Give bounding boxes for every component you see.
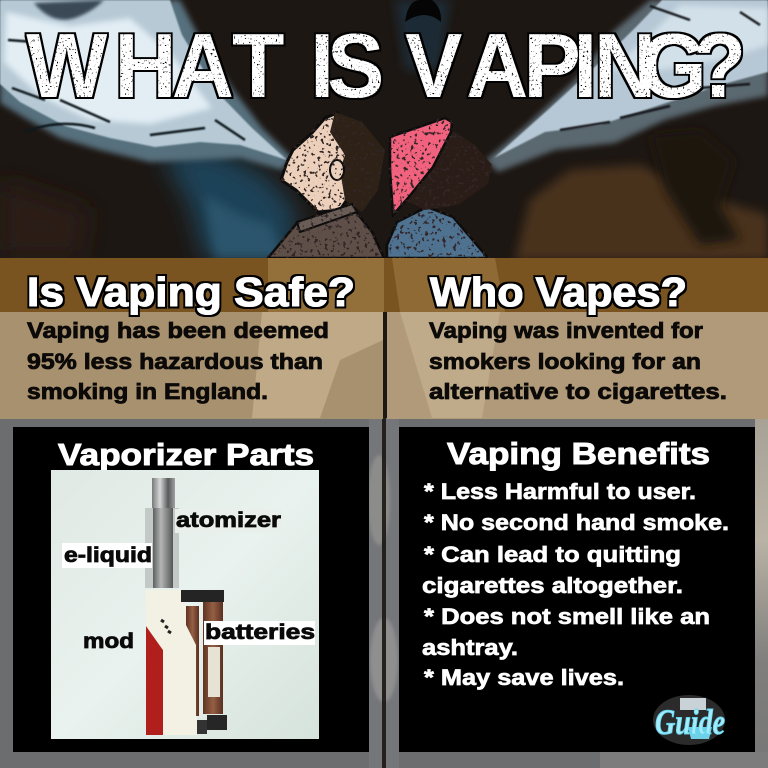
- panel: vaporizer parts: [13, 427, 369, 752]
- logo: guide: Guide: [655, 702, 725, 742]
- heading: who vapes: Who Vapes?: [430, 269, 687, 315]
- text: who vapes statement: [429, 318, 727, 404]
- label: atomizer: atomizer: [176, 508, 282, 532]
- man on right: hair and beard: [405, 125, 492, 210]
- title: WHAT IS VAPING?: [26, 15, 746, 117]
- label: e-liquid: e-liquid: [64, 543, 152, 567]
- man on left: body through text band: [252, 312, 383, 418]
- text: safety statement: 95% less hazardous than: [27, 349, 323, 374]
- logo: guide: [653, 695, 725, 745]
- atomizer tank: [145, 508, 179, 588]
- panel: who vapes: [387, 258, 768, 419]
- man on left: ear: [330, 160, 344, 180]
- list: benefits: ashtray.: [422, 635, 518, 660]
- lower background behind panels: [0, 418, 768, 768]
- red mod panel: [146, 626, 163, 735]
- list: benefits: [422, 479, 729, 690]
- text: safety statement: Vaping has been deemed: [27, 318, 329, 343]
- text: who vapes statement: alternative to cigarettes.: [429, 379, 727, 404]
- heading band: left: [0, 258, 768, 312]
- man on left: torso: [268, 207, 384, 258]
- heading: is vaping safe: Is Vaping Safe?: [27, 269, 355, 315]
- man on right: torso: [387, 207, 488, 258]
- panel: vaping benefits: [399, 427, 755, 752]
- list: benefits: cigarettes altogether.: [422, 573, 683, 598]
- label: mod: mod: [83, 629, 134, 653]
- label: batteries: batteries: [205, 620, 315, 644]
- man on left: collar: [297, 204, 357, 232]
- list: benefits: * Can lead to quitting: [424, 542, 681, 567]
- illustration: two men back to back: [268, 112, 492, 258]
- text: safety statement: [27, 318, 329, 404]
- atomizer top: [152, 478, 175, 508]
- man on left: head: [281, 113, 362, 212]
- panel: is vaping safe: [0, 258, 768, 419]
- list: benefits: * May save lives.: [424, 665, 624, 690]
- heading: vaporizer parts: Vaporizer Parts: [58, 437, 314, 472]
- man on left: hair: [330, 112, 385, 212]
- vaporizer device: [145, 478, 227, 735]
- batteries: [181, 590, 227, 734]
- list: benefits: * No second hand smoke.: [424, 510, 729, 535]
- mod buttons: [161, 620, 171, 633]
- man on right: pink cap: [390, 118, 452, 215]
- atomizer tube: [153, 508, 173, 588]
- smoke plume: right: [486, 0, 768, 172]
- list: benefits: * Does not smell like an: [424, 604, 710, 629]
- list: benefits: * Less Harmful to user.: [424, 479, 696, 504]
- text band: left: [0, 312, 383, 419]
- man on right: body through text band: [400, 312, 500, 418]
- man on left: torso through band: [268, 258, 384, 312]
- text: who vapes statement: smokers looking for an: [429, 349, 701, 374]
- photo background: [51, 470, 319, 739]
- man on right: torso through band: [392, 258, 505, 312]
- white mod body: [146, 590, 197, 735]
- text band: right: [387, 312, 768, 419]
- heading: vaping benefits: Vaping Benefits: [447, 436, 710, 471]
- smoke plume: left: [0, 0, 292, 170]
- text: who vapes statement: Vaping was invented for: [429, 318, 703, 343]
- text: safety statement: smoking in England.: [27, 379, 268, 404]
